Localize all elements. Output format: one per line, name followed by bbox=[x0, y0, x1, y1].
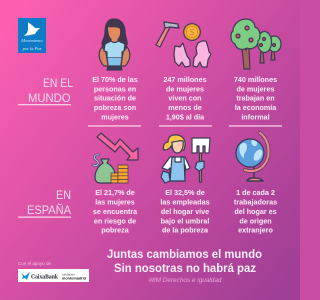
sponsor logos: CaixaBank bbox=[31, 274, 59, 280]
stat: 1 de cada 2: trabajadoras bbox=[234, 198, 277, 206]
stat: 740 millones bbox=[229, 75, 282, 127]
heading: En el mundo: MUNDO bbox=[28, 91, 70, 105]
heading: En España: ESPAÑA bbox=[27, 203, 71, 217]
icon: falling chart with money bag and coins bbox=[93, 133, 138, 183]
stat: 32,5 percent: bajo el umbral bbox=[161, 216, 209, 226]
stat: 21,7 percent: pobreza bbox=[101, 226, 130, 234]
stat: 1 de cada 2 bbox=[234, 188, 277, 234]
stat: 21,7 percent: las mujeres bbox=[95, 198, 135, 206]
closing headline bbox=[107, 249, 262, 275]
stat: 70 percent: mujeres bbox=[101, 112, 129, 122]
heading: En el mundo bbox=[18, 76, 73, 105]
closing headline: Juntas cambiamos el mundo bbox=[107, 249, 262, 261]
logo: Movimiento por la Paz: por la Paz bbox=[22, 46, 42, 51]
stat: 32,5 percent: de la pobreza bbox=[162, 226, 209, 234]
logo: Movimiento por la Paz: Movimiento bbox=[20, 38, 43, 43]
stat: 740 millones: la economía bbox=[235, 103, 277, 112]
stat: 1 de cada 2: de origen bbox=[239, 216, 272, 226]
stat: 1 de cada 2: del hogar es bbox=[234, 207, 277, 216]
stat: 740 millones: trabajan en bbox=[236, 94, 275, 102]
stat: 70 percent: pobreza son bbox=[94, 103, 136, 112]
icon: globe bbox=[236, 133, 269, 181]
logo: Movimiento por la Paz bbox=[18, 18, 46, 53]
icon: hammer, coin and broken piggy bank: $ bbox=[190, 28, 195, 37]
stat: 21,7 percent: se encuentra bbox=[93, 207, 138, 216]
sponsor logos: fundación bbox=[62, 272, 75, 276]
stat: 247 millones: 1,90$ al día bbox=[166, 112, 205, 122]
icon: cleaning worker with mop bbox=[161, 135, 210, 183]
stat: 32,5 percent: del hogar vive bbox=[161, 207, 209, 216]
stat: 740 millones: de mujeres bbox=[237, 84, 274, 94]
closing headline: Sin nosotras no habrá paz bbox=[114, 263, 256, 275]
stat: 21,7 percent bbox=[93, 188, 138, 234]
heading: En España: EN bbox=[56, 188, 71, 202]
sponsor logos: montemadrid bbox=[62, 276, 86, 280]
stat: 32,5 percent bbox=[160, 188, 210, 234]
icon: hammer, coin and broken piggy bank bbox=[156, 22, 211, 67]
heading: En España bbox=[18, 188, 71, 218]
sponsor note: Con el apoyo de bbox=[18, 261, 52, 266]
stat: 247 millones: viven con bbox=[168, 94, 202, 102]
icon: trees bbox=[231, 19, 281, 69]
stat: 70 percent: situación de bbox=[94, 94, 136, 102]
stat: 1 de cada 2: 1 de cada 2 bbox=[236, 188, 275, 197]
stat: 247 millones: de mujeres bbox=[166, 84, 204, 94]
heading: En el mundo: EN EL bbox=[43, 76, 73, 90]
hashtag: #8M Derechos e igualdad bbox=[148, 278, 222, 284]
stat: 32,5 percent: las empleadas bbox=[160, 198, 210, 206]
stat: 70 percent bbox=[88, 75, 141, 127]
stat: 70 percent: personas en bbox=[94, 84, 136, 94]
stat: 247 millones: 247 millones bbox=[163, 75, 207, 84]
sponsor logos bbox=[18, 269, 89, 282]
stat: 32,5 percent: El 32,5% de bbox=[165, 188, 205, 197]
stat: 247 millones bbox=[159, 75, 212, 127]
stat: 247 millones: menos de bbox=[168, 103, 202, 112]
stat: 21,7 percent: El 21,7% de bbox=[95, 188, 135, 197]
stat: 1 de cada 2: extranjero bbox=[238, 226, 273, 234]
stat: 740 millones: 740 millones bbox=[234, 75, 277, 84]
stat: 740 millones: informal bbox=[241, 112, 270, 122]
stat: 21,7 percent: en riesgo de bbox=[94, 216, 136, 226]
icon: woman bbox=[99, 19, 130, 70]
stat: 70 percent: El 70% de las bbox=[92, 75, 138, 84]
